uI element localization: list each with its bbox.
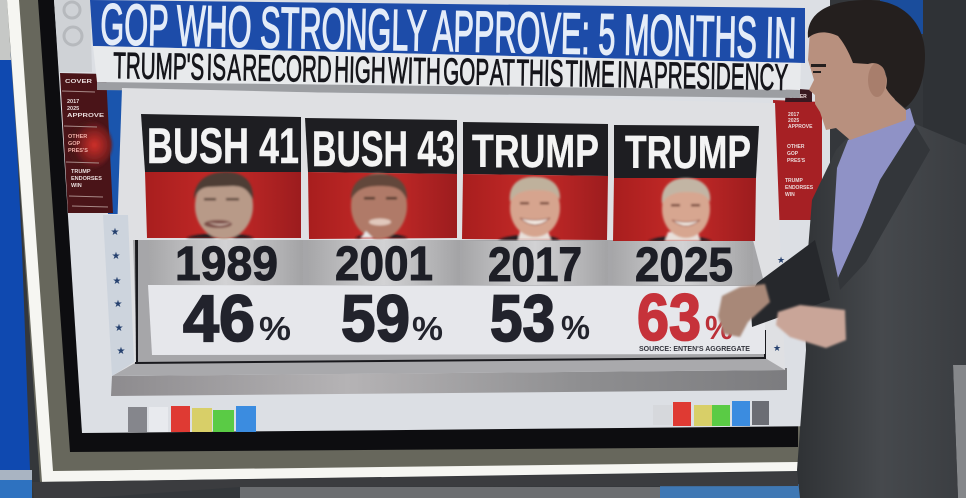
year band: 1989: 1989 xyxy=(175,238,278,291)
source note: SOURCE: ENTEN'S AGGREGATE xyxy=(639,346,750,353)
nav: Trump endorses win: ENDORSES xyxy=(71,176,102,182)
presenter: shirt xyxy=(832,108,915,278)
nav: Trump endorses win: TRUMP xyxy=(785,178,803,184)
presenter: hair xyxy=(808,0,925,108)
nav: Trump endorses win: WIN xyxy=(71,183,82,189)
presenter: jacket xyxy=(797,123,966,498)
year band: 2001: 2001 xyxy=(335,238,433,291)
portrait: Trump 2025 xyxy=(648,178,712,241)
nav: other GOP presidents: PRES'S xyxy=(68,148,88,154)
star: ★ xyxy=(113,276,122,287)
portrait: Bush 41 xyxy=(186,172,254,239)
nav: cover: COVER xyxy=(789,94,807,100)
header: Bush 41: BUSH 41 xyxy=(147,118,299,174)
value: 46%: 46 xyxy=(183,281,255,355)
right navigation menu xyxy=(773,88,826,340)
left navigation menu xyxy=(60,73,126,214)
right colour swatches xyxy=(653,401,769,426)
header: Bush 43 xyxy=(305,118,457,239)
value: 63%: 63 xyxy=(637,280,701,354)
column: Bush 43, 2001 xyxy=(305,118,460,291)
star: ★ xyxy=(114,299,123,310)
year band: 2025: 2025 xyxy=(635,239,733,292)
nav: Trump endorses win: TRUMP xyxy=(71,169,91,175)
value: 53%: 53 xyxy=(490,281,555,355)
title bar xyxy=(90,0,805,71)
lower right star: ★ xyxy=(773,343,781,353)
nav: approve: 2017 xyxy=(67,99,79,105)
header: Trump 2025 xyxy=(613,125,759,241)
star: ★ xyxy=(112,251,121,262)
header: Bush 43: BUSH 43 xyxy=(312,121,455,177)
star: ★ xyxy=(115,323,124,334)
portrait: Bush 43 xyxy=(351,173,408,239)
star: ★ xyxy=(111,227,120,238)
left star column xyxy=(103,215,134,376)
header: Trump 2017: TRUMP xyxy=(472,125,599,177)
presenter: right hand xyxy=(776,305,846,348)
presenter: neck and face xyxy=(808,30,906,140)
nav: approve: APPROVE xyxy=(788,124,813,130)
percent sign: % xyxy=(412,310,443,347)
screen background xyxy=(54,0,830,433)
nav: other GOP presidents: OTHER xyxy=(787,144,805,150)
percent sign: % xyxy=(561,309,590,346)
subtitle bar xyxy=(93,45,801,98)
value: 59%: 59 xyxy=(341,281,410,355)
year band: 2017: 2017 xyxy=(488,239,582,292)
nav: other GOP presidents: OTHER xyxy=(68,134,87,140)
nav: other GOP presidents: GOP xyxy=(787,151,799,157)
column: Bush 41, 1989 xyxy=(141,114,303,291)
presenter: eye and brow xyxy=(811,64,826,73)
upper right star: ★ xyxy=(777,255,785,265)
percentage row xyxy=(148,280,765,355)
nav: cover: COVER xyxy=(65,79,92,85)
chart panel xyxy=(111,88,787,396)
left colour swatches xyxy=(128,406,256,432)
left screen panel with icons xyxy=(54,0,92,72)
star: ★ xyxy=(117,346,126,357)
nav: Trump endorses win: WIN xyxy=(785,192,795,198)
year band: 1989 xyxy=(148,238,303,291)
column: Trump, 2025 xyxy=(612,125,759,292)
presenter: ear xyxy=(868,63,886,97)
nav: Trump endorses win: ENDORSES xyxy=(785,185,814,191)
right stars xyxy=(773,255,785,353)
portrait: Trump 2017 xyxy=(498,177,560,240)
percent sign: % xyxy=(259,310,291,347)
nav: other GOP presidents: PRES'S xyxy=(787,158,806,164)
presenter: lapel xyxy=(838,125,930,290)
nav: other GOP presidents: GOP xyxy=(68,141,81,147)
presenter xyxy=(718,0,966,498)
nav: approve: 2025 xyxy=(788,118,799,124)
nav: approve: 2017 xyxy=(788,112,799,118)
header: Trump 2025: TRUMP xyxy=(625,126,751,178)
nav: approve: APPROVE xyxy=(67,113,104,119)
nav: approve: 2025 xyxy=(67,106,79,112)
presenter: sleeve xyxy=(750,240,830,327)
column: Trump, 2017 xyxy=(462,122,608,292)
header: Bush 41 xyxy=(141,114,301,238)
presenter: left hand xyxy=(718,284,770,337)
year band: 2001 xyxy=(307,238,460,291)
header: Trump 2017 xyxy=(462,122,608,240)
percent sign: % xyxy=(705,309,733,346)
